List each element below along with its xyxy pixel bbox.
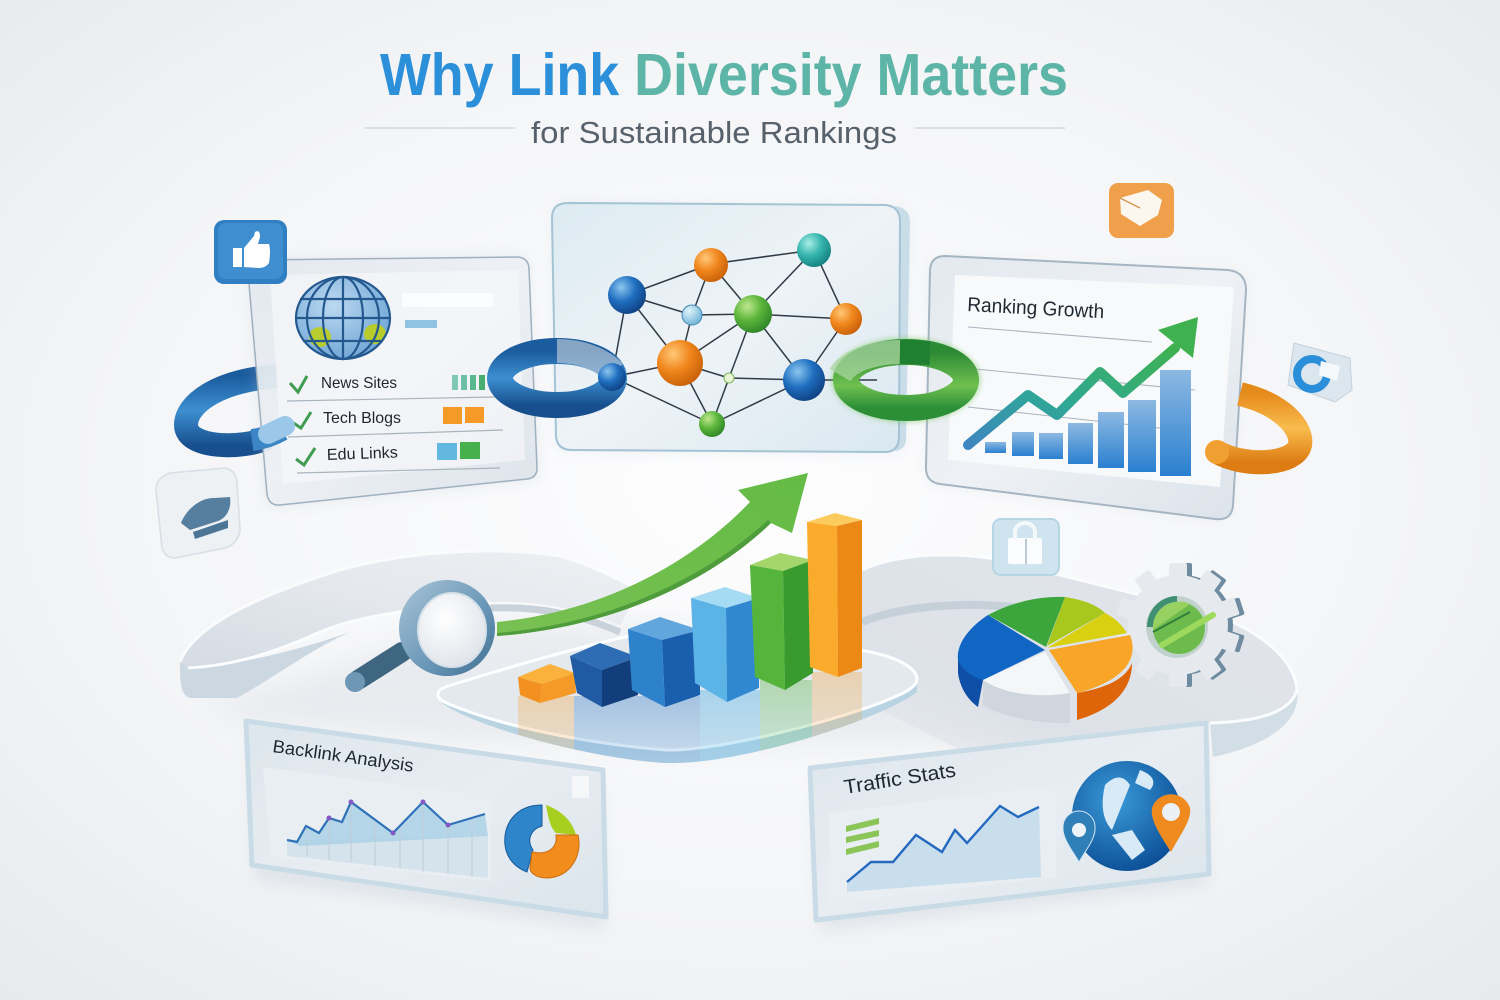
- pin: blue: [1063, 811, 1095, 862]
- heading: traffic stats: Traffic Stats: [842, 760, 957, 799]
- icon: orange box: [1109, 183, 1174, 238]
- icon: magnifying glass: [345, 580, 495, 692]
- subtitle: for Sustainable Rankings: [531, 115, 897, 150]
- line chart: [846, 806, 1041, 892]
- heading: ranking growth: Ranking Growth: [967, 294, 1105, 323]
- panel: site types: [248, 257, 537, 505]
- row: tech blogs: Tech Blogs: [323, 410, 401, 427]
- row: news sites: News Sites: [321, 375, 397, 392]
- icon: globe with map pins: [1063, 761, 1190, 871]
- link ring: green: [834, 340, 978, 420]
- light blue bar: [691, 587, 759, 702]
- link ring: orange: [1205, 394, 1300, 464]
- trend arrow: [968, 317, 1198, 445]
- row: edu links: [296, 442, 480, 465]
- icon: globe: [296, 277, 390, 359]
- platform: [438, 630, 917, 766]
- panel: backlink analysis: [246, 721, 606, 930]
- placeholder bars: [402, 293, 493, 328]
- icon: graduation cap: [156, 468, 240, 558]
- growth arrow: [497, 473, 808, 636]
- icon: padlock: [993, 519, 1059, 575]
- blue bar: [628, 617, 700, 707]
- network nodes: [608, 233, 862, 437]
- pie chart: [958, 597, 1133, 723]
- panel: traffic stats: [810, 723, 1209, 932]
- green bar: [750, 553, 813, 690]
- orange short bar: [518, 664, 576, 703]
- network edges: [612, 250, 877, 424]
- title: Why Link Diversity Matters: [380, 42, 1068, 108]
- icon: thumbs up: [214, 220, 287, 284]
- heading: backlink analysis: Backlink Analysis: [271, 736, 415, 776]
- link ring tip: blue left: [252, 426, 285, 440]
- icon: gear: [1116, 563, 1245, 687]
- bars: [985, 370, 1191, 476]
- icon: chat globe: [1288, 343, 1352, 402]
- icon: donut chart: [505, 805, 579, 878]
- panel: link network: [552, 203, 910, 452]
- link ring: blue left: [186, 376, 278, 445]
- line chart: [287, 800, 488, 878]
- panel: ranking growth: [926, 256, 1246, 519]
- glass ribbon track: [180, 551, 1298, 770]
- row: edu links: Edu Links: [327, 445, 398, 464]
- link ring: blue centre: [500, 351, 626, 405]
- row: news sites: [290, 375, 485, 392]
- navy bar: [570, 643, 638, 707]
- bar reflections: [518, 672, 862, 766]
- pin: orange: [1152, 794, 1190, 852]
- orange tall bar: [807, 513, 862, 677]
- bar chart 3D: [518, 513, 862, 707]
- row: tech blogs: [292, 407, 484, 428]
